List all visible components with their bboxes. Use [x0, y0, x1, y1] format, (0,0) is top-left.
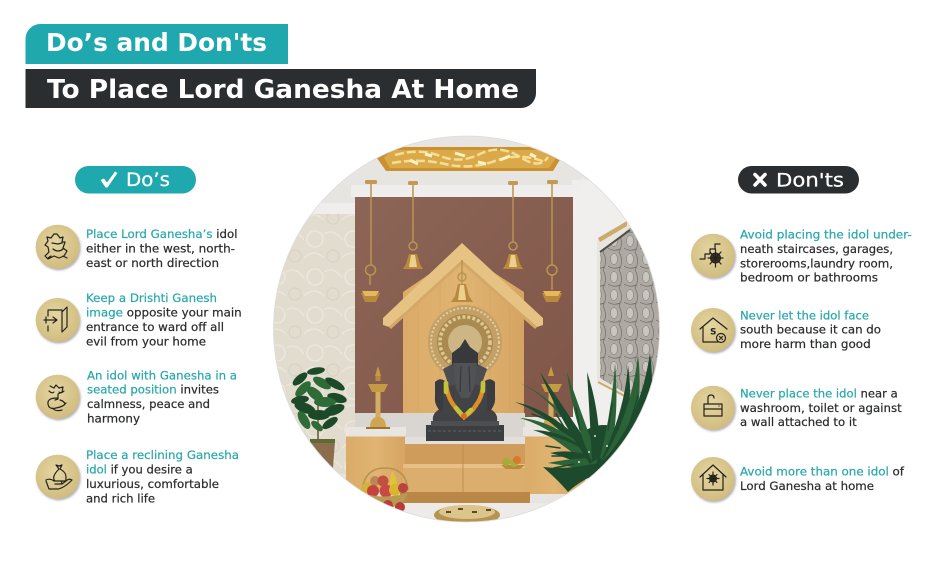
- brass plate on floor: [434, 505, 500, 522]
- fruit basket: [362, 468, 408, 512]
- item: underneath staircases: neath staircases, garages,: [740, 242, 893, 256]
- item: seated position: calmness, peace and: [87, 397, 210, 411]
- item: Keep a Drishti Ganesh image: evil from your home: [86, 334, 206, 348]
- floor: [330, 503, 590, 528]
- item: reclining Ganesha: idol if you desire a: [86, 463, 193, 477]
- icon: house with idol: [691, 457, 735, 501]
- item: underneath staircases: [691, 228, 912, 285]
- hanging bell 3: [503, 181, 523, 269]
- item: Keep a Drishti Ganesh image: image opposite your main: [86, 306, 242, 320]
- item: reclining Ganesha: and rich life: [86, 492, 155, 506]
- item: not more than one idol: [691, 457, 905, 501]
- item: reclining Ganesha: [36, 448, 239, 506]
- central photo: pooja room with Ganesha idol: [270, 130, 670, 530]
- item: never near washroom: a wall attached to it: [740, 415, 857, 429]
- right white wall: [572, 180, 626, 480]
- left cabinet: [346, 427, 406, 492]
- hanging lamp right: [542, 180, 562, 302]
- item: underneath staircases: bedroom or bathrooms: [740, 271, 878, 285]
- item: seated position: harmony: [87, 412, 140, 426]
- item: Keep a Drishti Ganesh image: entrance to ward off all: [86, 320, 224, 334]
- pill heading: Do's: [75, 166, 196, 194]
- icon: house with S: [691, 308, 735, 352]
- wooden shrine body and roof: [383, 243, 543, 413]
- item: never near washroom: Never place the idol near a: [740, 387, 898, 401]
- hanging lamp left: [361, 180, 380, 302]
- brown feature wall: [355, 197, 573, 417]
- icon: seated Ganesha: [36, 375, 80, 419]
- small offering plate: [501, 456, 525, 469]
- marble counter back: [355, 413, 525, 439]
- panel: do's list: [36, 225, 242, 506]
- item: seated position: [36, 368, 237, 426]
- item: Keep a Drishti Ganesh image: Keep a Drishti Ganesh: [86, 291, 217, 305]
- item: Place Lord Ganesha's idol: either in the west, north-: [86, 242, 235, 256]
- brass lamp left: [366, 366, 390, 429]
- mandala halo: [428, 305, 502, 379]
- left wallpaper wall: [270, 214, 356, 474]
- item: never near washroom: [691, 386, 902, 430]
- item: seated position: An idol with Ganesha in a: [87, 368, 237, 382]
- item: underneath staircases: Avoid placing the idol under-: [740, 228, 912, 242]
- panel: don'ts list: [691, 228, 912, 501]
- photo circle edge: [274, 136, 660, 522]
- right cabinet: [523, 427, 585, 494]
- centre drawers: [400, 437, 530, 503]
- title banner: Do's and Don'ts: Do’s and Don'ts: [46, 28, 267, 57]
- icon: Ganesha: [36, 225, 80, 269]
- item: not more than one idol: Avoid more than one idol of: [740, 465, 905, 479]
- icon: hand with money bag: [36, 455, 80, 499]
- left cornice: [312, 203, 355, 214]
- pill heading: Don'ts: [738, 166, 859, 194]
- item: Place Lord Ganesha's idol: [36, 225, 238, 270]
- item: Place Lord Ganesha's idol: Place Lord Ganesha’s idol: [86, 227, 238, 241]
- item: never face south: south because it can do: [740, 323, 881, 337]
- item: not more than one idol: Lord Ganesha at home: [740, 479, 874, 493]
- item: never face south: more harm than good: [740, 337, 871, 351]
- title banner: Do's and Don'ts: [26, 24, 288, 64]
- item: underneath staircases: storerooms,laundry room,: [740, 256, 893, 270]
- Ganesha idol: [426, 339, 504, 441]
- item: Keep a Drishti Ganesh image: [36, 291, 242, 348]
- icon: stairs with idol: [691, 234, 735, 278]
- icon: door with arrow: [36, 298, 80, 342]
- item: never near washroom: washroom, toilet or against: [740, 401, 902, 415]
- pill heading: Do's: Do’s: [126, 170, 170, 191]
- item: Place Lord Ganesha's idol: east or north direction: [86, 256, 219, 270]
- item: never face south: [691, 308, 881, 352]
- icon: wash basin: [691, 386, 735, 430]
- brass lamp right: [541, 366, 562, 428]
- centre hanging bell: [451, 260, 473, 302]
- hanging bell 2: [403, 181, 423, 269]
- left potted plant: [290, 366, 348, 468]
- pill heading: Don'ts: Don'ts: [776, 170, 844, 192]
- item: never face south: Never let the idol face: [740, 308, 869, 322]
- item: reclining Ganesha: luxurious, comfortable: [86, 477, 219, 491]
- framed wall art: [597, 222, 660, 400]
- golden ceiling panel: [377, 147, 561, 171]
- item: seated position: seated position invites: [87, 383, 219, 397]
- item: reclining Ganesha: Place a reclining Ganesha: [86, 448, 239, 462]
- right palm plant: [515, 353, 652, 492]
- icon: house with S: S: [710, 328, 716, 338]
- title banner: To Place Lord Ganesha At Home: To Place Lord Ganesha At Home: [47, 75, 519, 105]
- ceiling cornice: [351, 178, 589, 197]
